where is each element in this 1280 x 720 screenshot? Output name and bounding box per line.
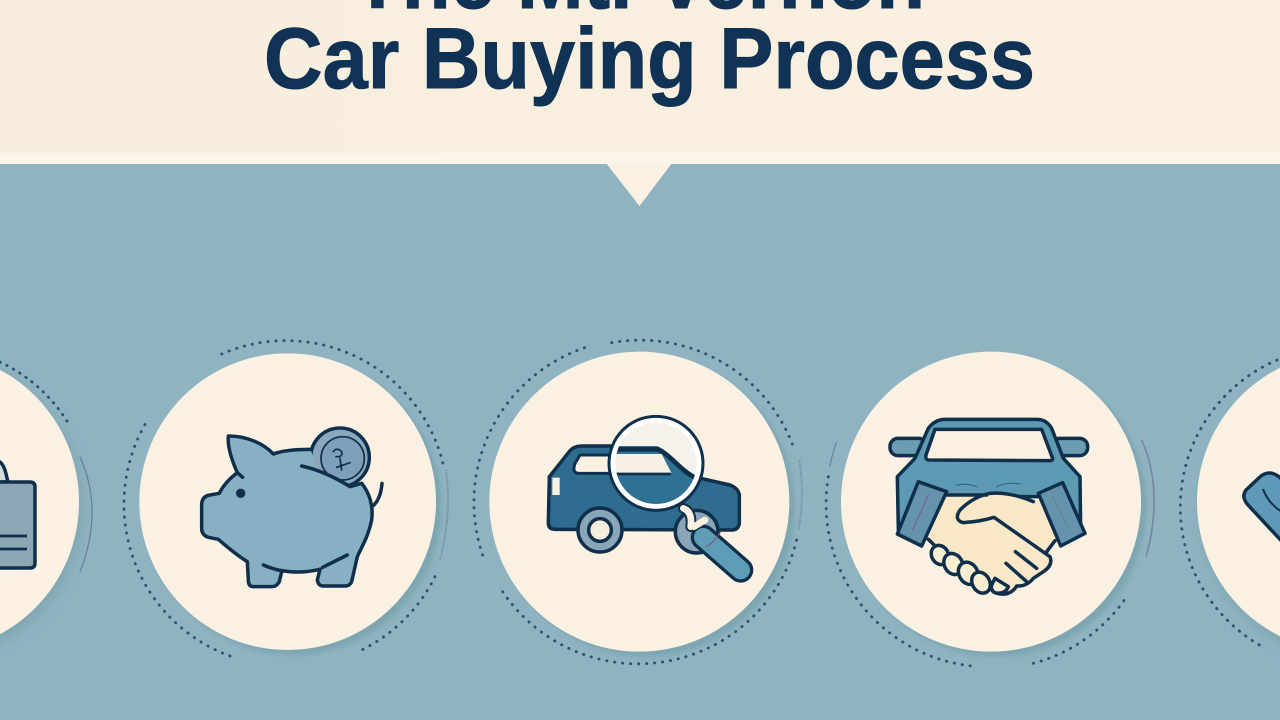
coin <box>311 428 369 487</box>
dotted ring <box>474 340 797 664</box>
dotted ring <box>124 341 443 656</box>
step: car inspection circle <box>474 340 802 664</box>
magnifier lens <box>608 414 704 512</box>
left cuff <box>897 482 947 546</box>
icon: car front with handshake <box>890 419 1088 597</box>
step: piggy bank savings circle <box>124 341 448 656</box>
rear wheel <box>578 508 622 552</box>
icon: cropped pen <box>1244 473 1280 560</box>
dotted ring <box>826 477 1127 666</box>
car body <box>548 446 739 530</box>
panel: teal background <box>0 160 1280 720</box>
step: handshake deal circle <box>826 352 1154 666</box>
icon: briefcase <box>0 461 35 568</box>
step: next circle (right, cropped) <box>1180 352 1280 660</box>
step: documents circle (left, cropped) <box>0 352 92 658</box>
panel: cream title banner with pointer <box>0 0 1280 206</box>
car front <box>890 419 1088 530</box>
pig body <box>202 436 372 587</box>
icon: car under magnifying glass <box>548 416 741 570</box>
front wheel <box>675 510 718 553</box>
clasped hands <box>928 493 1055 597</box>
right cuff <box>1038 483 1085 546</box>
magnifier handle <box>683 508 741 570</box>
icon: piggy bank <box>202 428 382 587</box>
title: Car Buying Process <box>264 11 1035 107</box>
